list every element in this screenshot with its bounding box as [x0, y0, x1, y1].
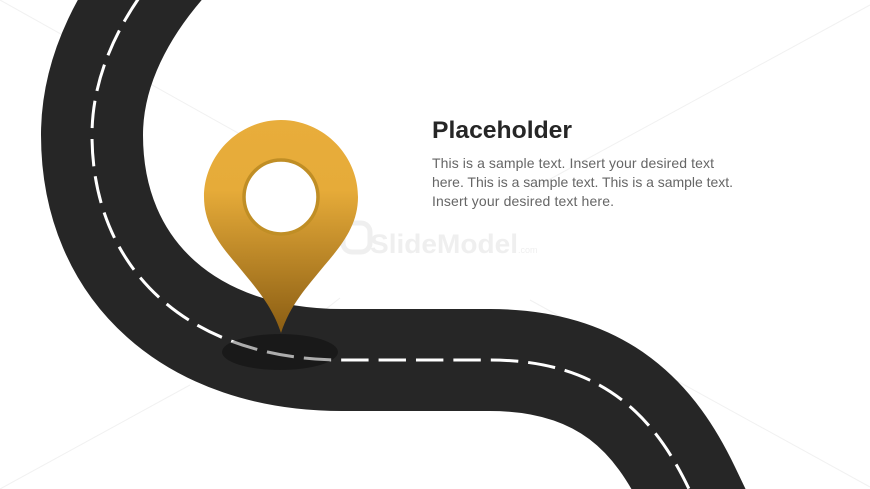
body text: here. This is a sample text. This is a sample text. — [432, 174, 733, 190]
heading: Placeholder — [432, 117, 572, 144]
body text: This is a sample text. Insert your desired text — [432, 155, 714, 171]
road centre dashes — [92, 0, 689, 489]
pin hole — [244, 160, 318, 234]
pin body — [204, 120, 358, 333]
watermark — [343, 223, 538, 259]
road — [92, 0, 689, 489]
body text: Insert your desired text here. — [432, 193, 614, 209]
pin shadow — [222, 334, 338, 370]
watermark: .com — [518, 245, 538, 255]
body text — [432, 155, 733, 209]
location pin — [204, 120, 358, 333]
road surface — [92, 0, 689, 489]
watermark: SlideModel — [370, 229, 518, 259]
